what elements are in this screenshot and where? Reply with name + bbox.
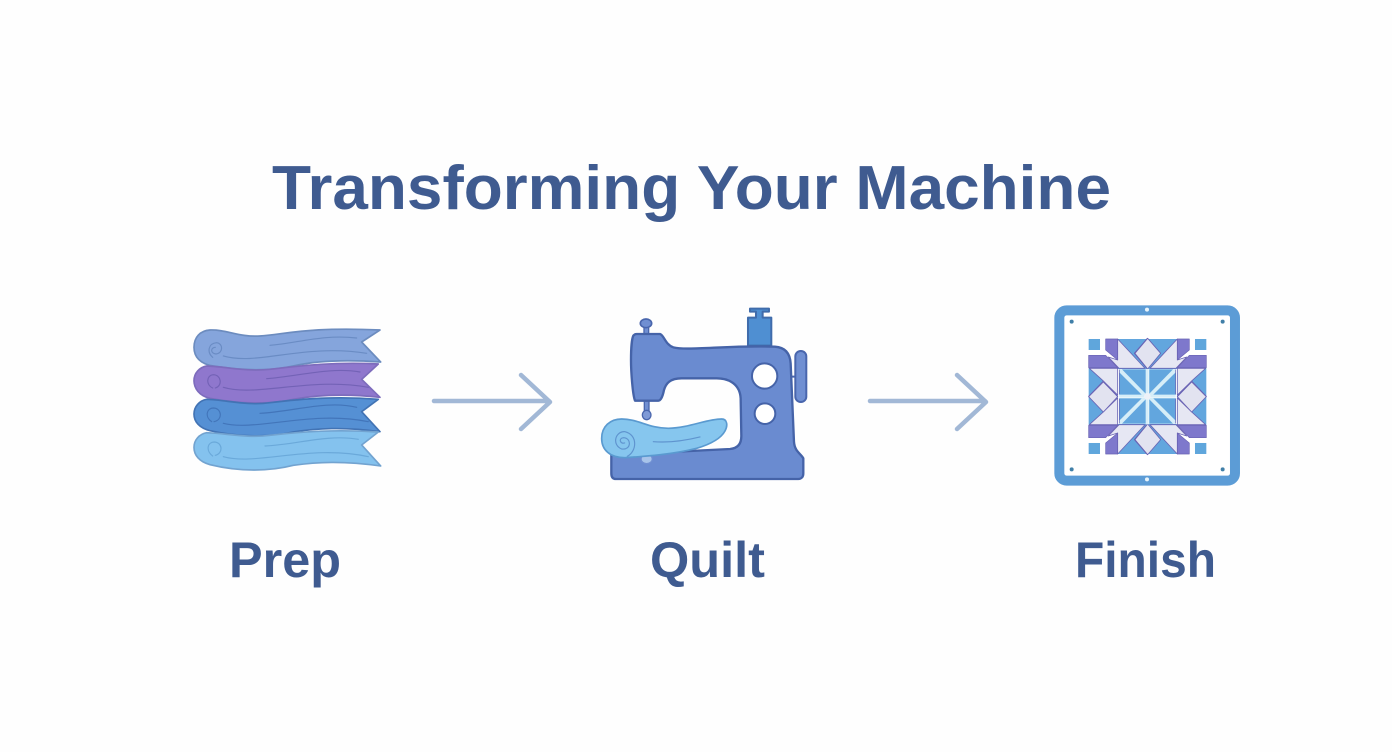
title: Transforming Your Machine: [272, 154, 1111, 223]
presser foot: [641, 454, 652, 464]
centre star lines: [1119, 369, 1176, 424]
icon: stacked fabric: [194, 329, 381, 470]
fabric layer: light blue: [194, 431, 381, 470]
upper dial: [752, 363, 777, 389]
fabric layer: periwinkle: [194, 329, 381, 370]
label: Prep: Prep: [229, 532, 341, 588]
lower dial: [755, 403, 775, 424]
fabric roll: [602, 419, 727, 458]
handwheel: [790, 351, 806, 402]
fabric layer: purple: [194, 363, 380, 403]
machine body: [611, 334, 803, 479]
icon: sewing machine: [602, 309, 806, 479]
frame dots: [1070, 308, 1225, 481]
label: Finish: Finish: [1075, 532, 1216, 588]
quilt block pattern: [1089, 338, 1206, 455]
arrow: quilt to finish: [870, 375, 986, 429]
arrow: prep to quilt: [434, 375, 550, 429]
spool pin: [748, 309, 771, 346]
icon: framed quilt block: [1059, 308, 1235, 481]
centre dot: [1144, 393, 1151, 400]
needle bar: [640, 319, 652, 420]
label: Quilt: Quilt: [650, 532, 765, 588]
frame: [1059, 310, 1235, 481]
fabric layer: blue: [194, 398, 380, 436]
